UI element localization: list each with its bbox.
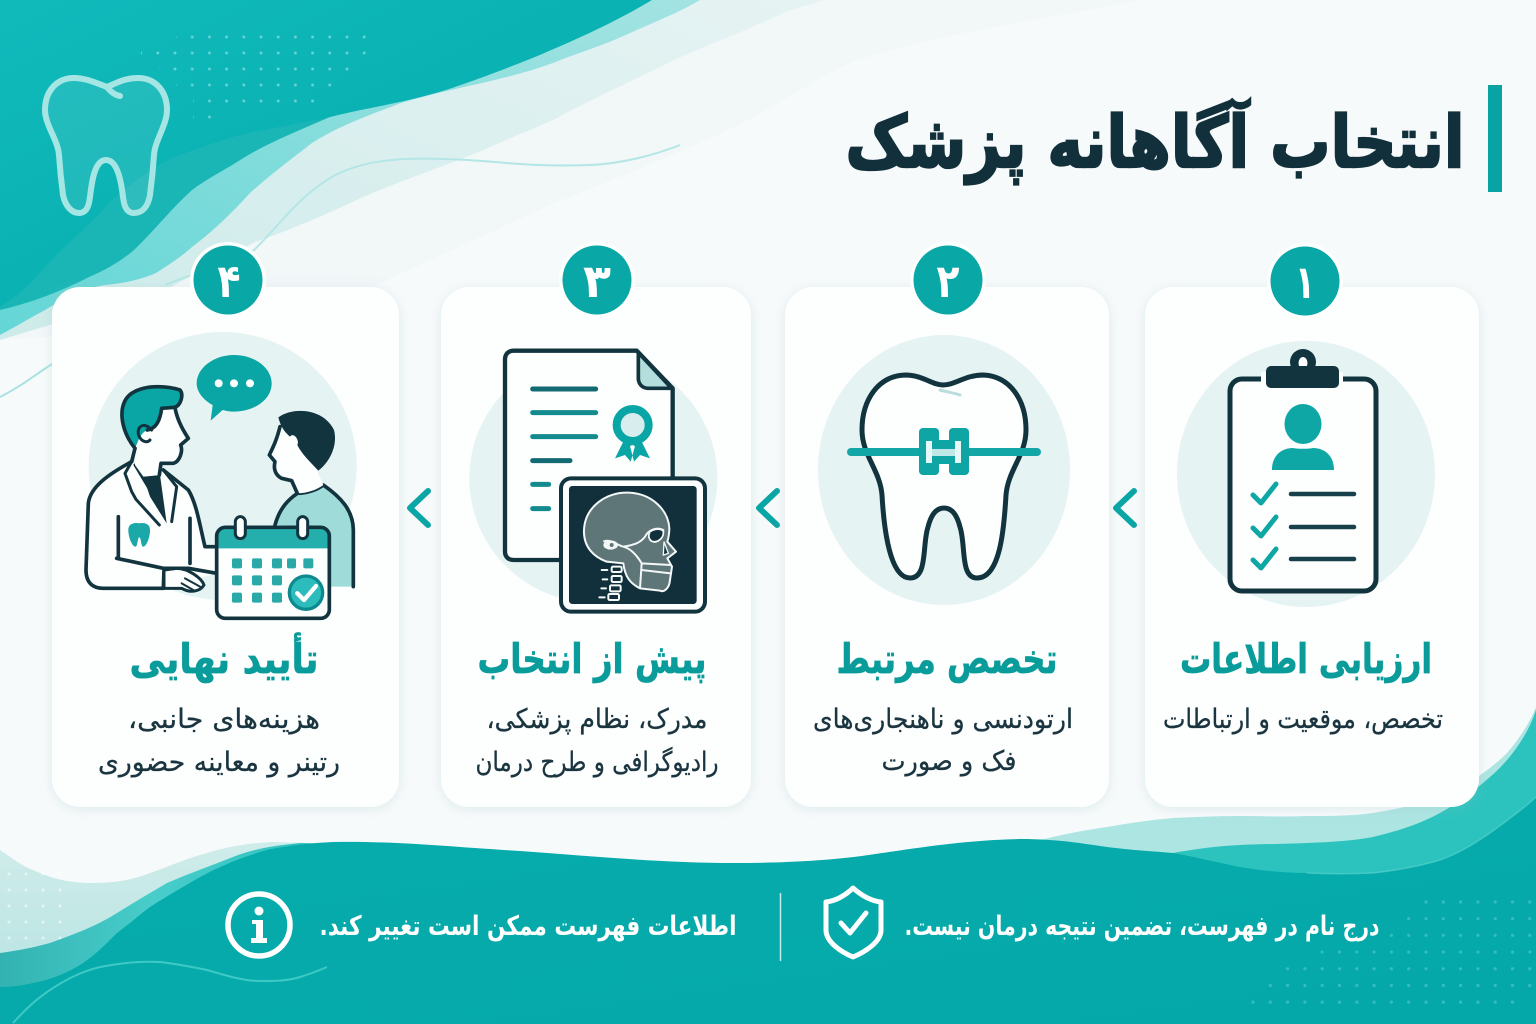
title accent bar [1488,85,1502,192]
description 2: فک و صورت [882,746,1016,777]
number badge 1 [1267,243,1343,319]
title [846,85,1502,192]
card 2 background [785,287,1109,807]
icon: shield check [826,888,881,957]
number badge 4 [190,242,266,318]
description 4: هزینه‌های جانبی، [128,704,320,735]
bottom wave band [0,707,1536,1024]
heading 3: پیش از انتخاب [478,635,706,684]
number badge 3: ۳ [583,254,611,308]
footer notes [228,888,1380,961]
panel: step 2 [785,242,1109,807]
note: treatment disclaimer: درج نام در فهرست، تضمین نتیجه درمان نیست. [904,911,1380,942]
description 3: مدرک، نظام پزشکی، [486,704,708,735]
number badge 2: ۲ [936,254,960,308]
arrow 1 to 2 [1116,491,1134,525]
description 3: رادیوگرافی و طرح درمان [476,746,718,778]
description 4 [98,704,340,778]
note: list may change: اطلاعات فهرست ممکن است تغییر کند. [320,911,736,942]
icon: clipboard with profile [1177,341,1435,607]
number badge 1: ۱ [1295,255,1315,309]
divider [780,893,782,961]
card 3 background [441,287,751,807]
arrow 3 to 4 [410,491,428,525]
panel: step 1 [1145,243,1479,807]
number badge 2 [910,242,986,318]
panel: step 4 [52,242,399,807]
heading 4: تأیید نهایی [130,632,318,683]
description 4: رتینر و معاینه حضوری [98,747,340,778]
top-left wave decoration [0,0,1140,397]
description 1: تخصص، موقعیت و ارتباطات [1163,704,1443,735]
description 2: ارتودنسی و ناهنجاری‌های [813,704,1073,735]
icon: tooth with braces [818,335,1070,605]
card 4 background [52,287,399,807]
number badge 3 [559,242,635,318]
heading 1: ارزیابی اطلاعات [1180,635,1432,683]
icon: info [228,894,290,956]
icon: document and x-ray [469,351,717,612]
description 2 [813,704,1073,777]
number badge 4: ۴ [218,254,240,308]
arrow 2 to 3 [759,491,777,525]
card 1 background [1145,287,1479,807]
icon: tooth logo [45,78,167,213]
heading 2: تخصص مرتبط [836,635,1058,683]
icon: doctor and patient [86,332,357,618]
description 3 [476,704,718,778]
panel: step 3 [441,242,751,807]
